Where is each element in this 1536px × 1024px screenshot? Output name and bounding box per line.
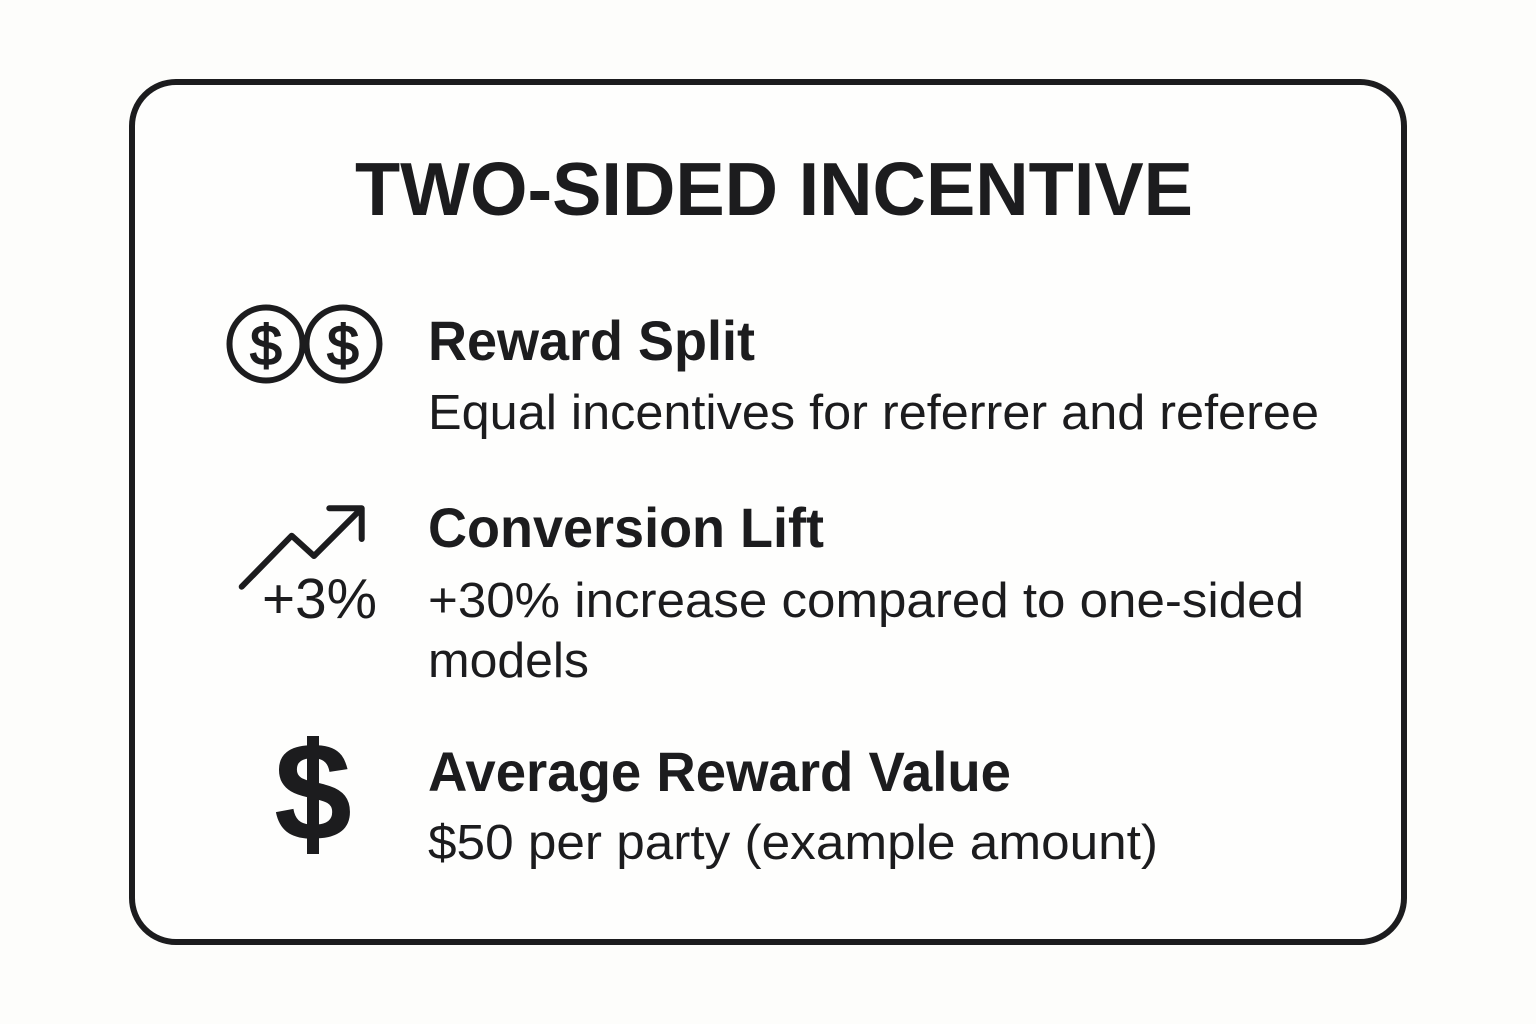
title: TWO-SIDED INCENTIVE (355, 147, 1193, 231)
heading: average reward value: Average Reward Value (428, 740, 1011, 803)
row: conversion lift (242, 496, 1304, 688)
text: conversion lift description line 2: models (428, 634, 589, 688)
icon: rising arrow with +3% (242, 508, 377, 631)
row: reward split (230, 308, 1319, 440)
icon: large dollar sign: $ (274, 713, 352, 870)
heading: conversion lift: Conversion Lift (428, 496, 824, 559)
icon: two dollar coins: $ (250, 314, 282, 378)
row: average reward value (274, 713, 1158, 870)
text: average reward description: $50 per party (example amount) (428, 816, 1158, 870)
icon: two dollar coins: $ (327, 314, 359, 378)
icon: two dollar coins (230, 308, 380, 380)
panel: card (132, 82, 1404, 942)
text: reward split description: Equal incentives for referrer and referee (428, 386, 1319, 440)
icon: rising arrow with +3%: +3% (262, 567, 377, 631)
text: conversion lift description: +30% increase compared to one-sided (428, 574, 1304, 628)
heading: reward split: Reward Split (428, 309, 755, 372)
